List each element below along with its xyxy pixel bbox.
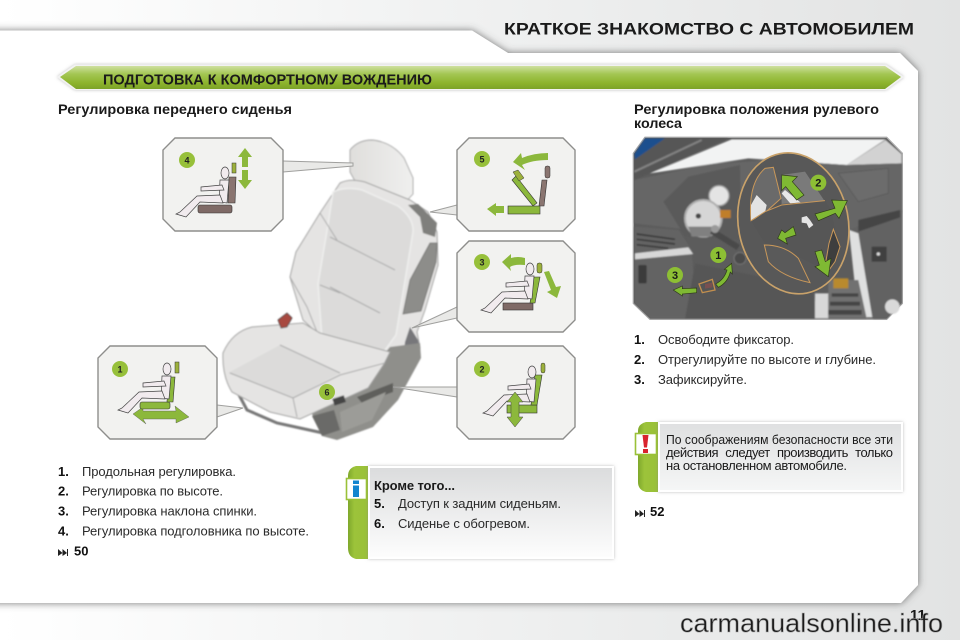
safety warning note: По соображениям безопасности все эти <box>666 432 893 447</box>
heading: front seat: Регулировка переднего сиденья <box>58 101 292 117</box>
info note: Кроме того... <box>374 478 455 493</box>
safety warning note: действия следует производить только <box>666 445 893 460</box>
centre and right lower dash <box>685 263 818 318</box>
photo badges <box>810 175 826 191</box>
heading: steering wheel <box>634 101 879 131</box>
callout 4: headrest height: 4 <box>184 156 190 166</box>
page title: КРАТКОЕ ЗНАКОМСТВО С АВТОМОБИЛЕМ <box>504 20 914 38</box>
safety warning note: на остановленном автомобиле. <box>666 458 847 473</box>
page reference 52: 52 <box>650 504 664 519</box>
info note: 5. <box>374 496 385 511</box>
steering wheel list <box>634 332 876 387</box>
info note: 6. <box>374 516 385 531</box>
seat adjustment list: Регулировка по высоте. <box>82 484 223 498</box>
callout 1: fore-aft adjustment <box>98 346 217 439</box>
steering wheel photo: 3 <box>672 270 678 282</box>
red belt buckle <box>278 313 292 328</box>
wheel openings <box>750 167 781 221</box>
headrest <box>350 140 413 208</box>
seat illustration <box>223 140 438 440</box>
seat base plastic <box>312 343 421 440</box>
green section banner <box>57 64 904 90</box>
seat adjustment list: Регулировка наклона спинки. <box>82 504 257 518</box>
steering wheel list: 2. <box>634 352 645 367</box>
top release handle <box>408 204 437 237</box>
callout 5: rear access <box>457 138 575 231</box>
callout 1: fore-aft adjustment: 1 <box>117 364 123 374</box>
side panel of backrest <box>403 243 437 314</box>
lower dash left <box>634 227 695 318</box>
steering wheel list: 3. <box>634 372 645 387</box>
instrument cowl <box>663 165 742 240</box>
green section banner: ПОДГОТОВКА К КОМФОРТНОМУ ВОЖДЕНИЮ <box>103 72 432 88</box>
steering wheel list: Освободите фиксатор. <box>658 332 794 347</box>
seat adjustment list: Продольная регулировка. <box>82 464 236 479</box>
info note: Доступ к задним сиденьям. <box>398 496 561 511</box>
seat adjustment list: 1. <box>58 464 69 479</box>
badge 6 on seat <box>319 384 335 400</box>
backrest lever <box>404 327 420 352</box>
callout connectors <box>217 161 457 417</box>
seat adjustment list: 3. <box>58 504 69 518</box>
seat adjustment list: 2. <box>58 484 69 498</box>
callout 3: backrest angle <box>457 241 575 332</box>
logo <box>802 216 813 228</box>
seat adjustment list: 4. <box>58 524 69 538</box>
wheel <box>726 143 861 304</box>
heading: steering wheel: колеса <box>634 115 682 131</box>
callout 2: height adjustment <box>457 346 575 439</box>
seat adjustment list: Регулировка подголовника по высоте. <box>82 524 309 538</box>
windshield <box>650 139 886 173</box>
steering wheel list: Отрегулируйте по высоте и глубине. <box>658 352 876 367</box>
steering wheel list: Зафиксируйте. <box>658 372 747 387</box>
steering wheel photo: 1 <box>715 250 721 262</box>
backrest <box>290 180 438 378</box>
info icon <box>346 478 366 500</box>
adjustment arrows <box>673 175 847 296</box>
release lever <box>699 279 715 293</box>
seat cushion <box>223 323 390 419</box>
page reference 50 <box>58 544 88 558</box>
info note: Сиденье с обогревом. <box>398 516 530 531</box>
seat adjustment list <box>58 464 309 538</box>
watermark: carmanualsonline.info <box>680 608 943 638</box>
heading: steering wheel: Регулировка положения рулевого <box>634 101 879 117</box>
page reference 52 <box>635 504 664 519</box>
badge 6 on seat: 6 <box>324 388 330 398</box>
steering wheel list: 1. <box>634 332 645 347</box>
stalk <box>710 228 740 250</box>
steering wheel photo: 2 <box>815 178 821 190</box>
page number: 11 <box>910 607 926 624</box>
callout 2: height adjustment: 2 <box>479 364 485 374</box>
callout 5: rear access: 5 <box>479 154 485 164</box>
warning icon <box>636 434 656 454</box>
callout 4: headrest height <box>163 138 283 231</box>
callout 3: backrest angle: 3 <box>479 258 485 268</box>
info note <box>346 466 614 559</box>
page reference 50: 50 <box>74 544 88 558</box>
dashboard top <box>634 160 902 230</box>
safety warning note <box>636 422 903 492</box>
heated seat switch <box>332 395 346 406</box>
seat rail <box>238 393 323 433</box>
steering wheel photo <box>633 137 902 319</box>
